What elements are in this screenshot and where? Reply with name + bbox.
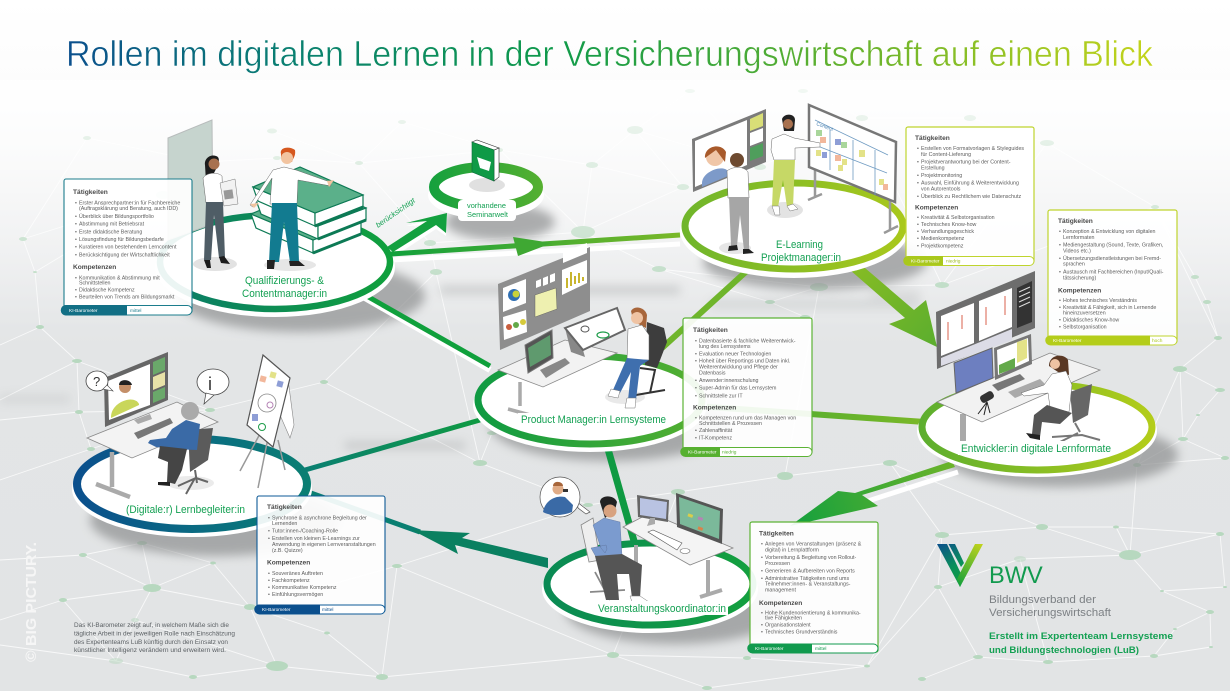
plate: vorhandene Seminarwelt: [428, 167, 544, 221]
list: Kompetenzen: Kommunikation & Abstimmung mit: [79, 275, 160, 281]
list: Kompetenzen: •: [695, 416, 697, 422]
list: Kompetenzen: Souveränes Auftreten: [272, 571, 323, 577]
illustration: developer desk with monitors: [936, 271, 1100, 446]
list: Tätigkeiten: management: [765, 588, 796, 594]
list: Tätigkeiten: von Autorentools: [921, 187, 961, 193]
icon: phone call bubble: [540, 477, 590, 517]
list: Kompetenzen: •: [75, 275, 77, 281]
BWV wordmark: BWV: [989, 563, 1043, 589]
list: Tätigkeiten: Überblick zu Rechtlichem wie Datenschutz: [921, 193, 1021, 200]
logo: BWV: [937, 544, 1173, 656]
plate: Qualifizierungs- und Contentmanager: [155, 215, 395, 317]
list: Tätigkeiten: Lösungsfindung für Bildungsbedarfe: [79, 237, 164, 243]
list: Kompetenzen: Kommunikative Kompetenz: [272, 585, 337, 591]
role label: E-Learning Projektmanager: E-Learning: [776, 239, 823, 251]
list: Kompetenzen: IT-Kompetenz: [699, 435, 732, 441]
list: Kompetenzen: Selbstorganisation: [1063, 324, 1107, 330]
list: Kompetenzen: •: [75, 295, 77, 301]
list: Tätigkeiten: •: [75, 229, 77, 235]
list: Tätigkeiten: •: [695, 338, 697, 344]
title: Rollen im digitalen Lernen in der Versicherungswirtschaft auf einen Blick: [66, 33, 1154, 74]
list: Tätigkeiten: Vorbereitung & Begleitung von Rollout-: [765, 555, 857, 561]
plate: Entwickler: [917, 384, 1157, 477]
KI-Barometer: hoch: KI-Barometer: [1053, 338, 1082, 344]
list: Tätigkeiten: Weiterentwicklung und Pflege der: [699, 365, 778, 371]
heading: Kompetenzen: Kompetenzen: [915, 204, 958, 211]
icon: info bubble: i: [208, 374, 212, 394]
KI-Barometer: hoch: hoch: [1152, 338, 1163, 344]
heading: Kompetenzen: Kompetenzen: [1058, 287, 1101, 294]
list: Tätigkeiten: •: [268, 528, 270, 534]
list: Tätigkeiten: Überblick über Bildungsportfolio: [79, 213, 154, 220]
role label: Veranstaltungskoordinator: Veranstaltungskoordinator:in: [598, 603, 726, 615]
role label: Entwickler: Entwickler:in digitale Lernformate: [961, 443, 1111, 455]
illustration: product manager statistics board: [498, 243, 590, 350]
list: Kompetenzen: •: [1059, 298, 1061, 304]
list: Tätigkeiten: •: [695, 393, 697, 399]
list: Tätigkeiten: •: [75, 214, 77, 220]
list: Tätigkeiten: •: [75, 200, 77, 206]
list: Tätigkeiten: •: [761, 576, 763, 582]
list: Kompetenzen: Schnittstellen: [79, 280, 111, 286]
panel: Veranstaltungskoordinator: [747, 522, 878, 653]
list: Kompetenzen: •: [1059, 317, 1061, 323]
list: Tätigkeiten: Mediengestaltung (Sound, Texte, Grafiken,: [1063, 242, 1163, 248]
list: Tätigkeiten: Erste didaktische Beratung: [79, 229, 142, 235]
note: KI-Barometer explanation: tägliche Arbeit in der jeweiligen Rolle nach Einschätzung: [74, 630, 235, 638]
heading: Tätigkeiten: Tätigkeiten: [693, 327, 728, 334]
list: Kompetenzen: Kreativität & Selbstorganisation: [921, 215, 995, 221]
list: Tätigkeiten: Abstimmung mit Betriebsrat: [79, 222, 145, 228]
illustration: project whiteboard: Content: [815, 121, 834, 133]
list: Tätigkeiten: Erstellen von Formatvorlagen & Styleguides: [921, 146, 1024, 152]
list: Tätigkeiten: Hoheit über Reportings und Daten inkl.: [699, 359, 790, 365]
plate: Product Manager: [473, 356, 707, 452]
line: Qualifizierung to Product Manager: [365, 298, 490, 370]
list: Tätigkeiten: sprachen: [1063, 262, 1085, 268]
list: Tätigkeiten: •: [75, 245, 77, 251]
list: Tätigkeiten: •: [268, 536, 270, 542]
list: Kompetenzen: Technisches Know-how: [921, 222, 977, 228]
KI-Barometer: niedrig: KI-Barometer: [911, 258, 940, 264]
list: Tätigkeiten: Kuratieren von bestehendem Lerncontent: [79, 245, 177, 251]
list: Tätigkeiten: •: [695, 351, 697, 357]
list: Tätigkeiten: Datenbasierte & fachliche Weiterentwick-: [699, 338, 796, 344]
list: Tätigkeiten: •: [761, 555, 763, 561]
list: Kompetenzen: •: [1059, 324, 1061, 330]
list: Kompetenzen: Didaktische Kompetenz: [79, 287, 135, 293]
list: Kompetenzen: •: [917, 222, 919, 228]
KI-Barometer: mittel: [254, 604, 385, 614]
list: Tätigkeiten: tätssicherung): [1063, 275, 1097, 281]
note: KI-Barometer explanation: künstlicher Intelligenz verändern und erweitern wird.: [74, 647, 226, 654]
KI-Barometer: mittel: KI-Barometer: [69, 308, 98, 314]
list: Tätigkeiten: •: [1059, 242, 1061, 248]
illustration: glass door: [168, 120, 213, 240]
role label: Qualifizierungs- und Contentmanager: Qualifizierungs- &: [245, 275, 325, 287]
KI-Barometer: niedrig: niedrig: [722, 450, 737, 456]
heading: Tätigkeiten: Tätigkeiten: [759, 531, 794, 538]
list: Tätigkeiten: •: [1059, 256, 1061, 262]
list: Tätigkeiten: •: [917, 173, 919, 179]
line: Lernbegleiter to Veranstaltung: [308, 492, 420, 532]
list: Tätigkeiten: •: [695, 378, 697, 384]
plate shadows: [0, 204, 1178, 644]
list: Kompetenzen: •: [917, 236, 919, 242]
KI-Barometer: niedrig: [680, 447, 812, 456]
list: Kompetenzen: •: [75, 287, 77, 293]
illustration: man with red hair: [250, 148, 334, 271]
list: Kompetenzen: Medienkompetenz: [921, 236, 965, 242]
label: vorhandene Seminarwelt: vorhandene: [467, 203, 506, 210]
arrow: Qualifizierung to E-Learning white edge: [391, 244, 680, 260]
illustration: project whiteboard: [808, 105, 898, 233]
list: Kompetenzen: •: [761, 630, 763, 636]
list: Tätigkeiten: Synchrone & asynchrone Begleitung der: [272, 515, 367, 521]
role label: Qualifizierungs- und Contentmanager: Contentmanager:in: [242, 288, 327, 300]
list: Tätigkeiten: •: [695, 359, 697, 365]
KI-Barometer: mittel: [61, 305, 192, 316]
heading: Kompetenzen: Kompetenzen: [267, 560, 310, 567]
panel: E-Learning Projektmanager: [903, 127, 1034, 266]
icon: info bubble: [197, 369, 229, 404]
illustration: stacked books: [251, 167, 366, 253]
illustration: woman with report: [193, 155, 238, 271]
list: Tätigkeiten: Anwendung in eigenen Lernveranstaltungen: [272, 542, 376, 548]
list: Tätigkeiten: (z.B. Quizze): [272, 548, 303, 554]
list: Tätigkeiten: Tutor:innen-/Coaching-Rolle: [272, 528, 338, 534]
list: Kompetenzen: Hohes technisches Verständnis: [1063, 298, 1137, 304]
list: Tätigkeiten: lung des Lernsystems: [699, 344, 751, 350]
icon: question bubble: [86, 371, 113, 391]
illustration: coordinator person on chair: [581, 496, 649, 602]
list: Kompetenzen: Technisches Grundverständnis: [765, 630, 838, 636]
heading: Kompetenzen: Kompetenzen: [693, 405, 736, 412]
list: Kompetenzen: Projektkompetenz: [921, 243, 964, 249]
list: Kompetenzen: Zahlenaffinität: [699, 428, 733, 434]
list: Kompetenzen: Einfühlungsvermögen: [272, 592, 323, 598]
list: Kompetenzen: Organisationstalent: [765, 623, 811, 629]
list: Kompetenzen: •: [695, 435, 697, 441]
panel: Lernbegleiter: [254, 496, 385, 614]
list: Kompetenzen: •: [917, 215, 919, 221]
KI-Barometer: mittel: mittel: [815, 646, 826, 652]
line: E-Learning to Product Manager: [662, 268, 750, 348]
line: Product Manager to Lernbegleiter: [305, 420, 480, 470]
heading: Tätigkeiten: Tätigkeiten: [915, 135, 950, 142]
note: KI-Barometer explanation: Das KI-Barometer zeigt auf, in welchem Maße sich die: [74, 622, 230, 629]
list: Tätigkeiten: Erster Ansprechpartner:in für Fachbereiche: [79, 200, 180, 206]
arrow: Qualifizierung to Seminarwelt green: [387, 213, 447, 252]
plate: Lernbegleiter: [72, 439, 312, 537]
list: Tätigkeiten: •: [761, 541, 763, 547]
illustration: developer person: [1021, 356, 1100, 442]
role label: E-Learning Projektmanager: Projektmanager:in: [761, 252, 841, 264]
list: Tätigkeiten: Super-Admin für das Lernsystem: [699, 386, 777, 392]
arrow: Qualifizierung to Seminarwelt: [390, 216, 447, 256]
arrowhead: Qualifizierung to E-Learning: [513, 237, 552, 256]
list: Kompetenzen: •: [695, 428, 697, 434]
list: Kompetenzen: •: [268, 578, 270, 584]
KI-Barometer: niedrig: KI-Barometer: [688, 450, 717, 456]
label: vorhandene Seminarwelt: Seminarwelt: [467, 212, 508, 219]
KI-Barometer: mittel: [747, 644, 878, 653]
vertical credit: BIG PICTURY: © BIG PICTURY.: [23, 542, 40, 662]
list: Tätigkeiten: •: [1059, 229, 1061, 235]
list: Kompetenzen: •: [268, 585, 270, 591]
illustration: trainer person: [148, 402, 214, 494]
role label: Product Manager: Product Manager:in Lernsysteme: [521, 414, 666, 426]
credit: Expertenteam: und Bildungstechnologien (LuB): [989, 645, 1139, 656]
arrow: E-Learning to Entwickler: [850, 262, 937, 347]
KI-Barometer: mittel: mittel: [130, 308, 141, 314]
illustration: woman from behind: [719, 153, 754, 254]
list: Tätigkeiten: Berücksichtigung der Wirtschaftlichkeit: [79, 252, 170, 258]
list: Tätigkeiten: •: [761, 568, 763, 574]
list: Tätigkeiten: Administrative Tätigkeiten rund ums: [765, 576, 849, 582]
list: Tätigkeiten: Konzeption & Entwicklung von digitalen: [1063, 229, 1156, 235]
list: Tätigkeiten: •: [917, 159, 919, 165]
list: Tätigkeiten: •: [75, 237, 77, 243]
list: Tätigkeiten: Schnittstelle zur IT: [699, 393, 743, 399]
list: Tätigkeiten: Erstellen von kleinen E-Learnings zur: [272, 536, 360, 542]
list: Tätigkeiten: Teilnehmer:innen- & Veranstaltungs-: [765, 582, 851, 588]
list: Kompetenzen: Hohe Kundenorientierung & kommunika-: [765, 610, 861, 616]
arrow: Qualifizierung to E-Learning: [391, 235, 680, 254]
plate: Veranstaltungskoordinator: [542, 543, 758, 633]
panel: Entwickler: [1045, 210, 1177, 345]
list: Tätigkeiten: Evaluation neuer Technologien: [699, 351, 771, 357]
list: Tätigkeiten: Anwender:innenschulung: [699, 378, 759, 384]
arrow: Entwickler to Veranstaltung: [790, 461, 955, 526]
list: Tätigkeiten: digital) in Lernplattform: [765, 547, 819, 553]
label backing strips: [518, 413, 1113, 615]
connection lines and arrows: [305, 213, 958, 568]
network top fade: [0, 80, 1230, 330]
list: Kompetenzen: Kompetenzen rund um das Managen von: [699, 416, 796, 422]
list: Kompetenzen: •: [917, 229, 919, 235]
note: KI-Barometer explanation: des Expertenteams LuB künftig durch den Einsatz von: [74, 639, 228, 646]
arrow: Veranstaltung to Lernbegleiter: [412, 530, 548, 568]
list: Kompetenzen: •: [917, 243, 919, 249]
list: Kompetenzen: •: [268, 592, 270, 598]
icon: BWV V mark: [937, 544, 983, 587]
KI-Barometer: mittel: KI-Barometer: [262, 607, 291, 613]
list: Tätigkeiten: Projektmonitoring: [921, 173, 962, 179]
label: berücksichtigt: berücksichtigt: [374, 195, 417, 230]
list: Kompetenzen: Beurteilen von Trends am Bildungsmarkt: [79, 295, 175, 301]
list: Tätigkeiten: Projektverantwortung bei der Content-: [921, 159, 1011, 165]
illustration: flipchart: [240, 355, 294, 488]
heading: Tätigkeiten: Tätigkeiten: [73, 189, 108, 196]
line: Product Manager to Entwickler: [695, 406, 925, 422]
list: Tätigkeiten: •: [75, 252, 77, 258]
illustration: product manager person: [605, 308, 667, 408]
list: Tätigkeiten: •: [695, 386, 697, 392]
KI-Barometer: niedrig: [903, 256, 1034, 266]
list: Kompetenzen: tive Fähigkeiten: [765, 616, 802, 622]
list: Tätigkeiten: •: [917, 146, 919, 152]
illustration: video wall: [692, 109, 766, 192]
list: Tätigkeiten: (Auftragsklärung und Beratung, auch IDD): [79, 206, 178, 212]
illustration: trainer desk with video screen: [87, 352, 218, 497]
heading: Kompetenzen: Kompetenzen: [73, 264, 116, 271]
list: Tätigkeiten: •: [1059, 269, 1061, 275]
list: Kompetenzen: •: [761, 610, 763, 616]
line: Qualifizierung to Product Manager green: [365, 295, 490, 366]
list: Kompetenzen: •: [268, 571, 270, 577]
list: Tätigkeiten: Auswahl, Einführung & Weiterentwicklung: [921, 181, 1019, 187]
list: Kompetenzen: Schnittstellen & Prozessen: [699, 421, 762, 427]
list: Tätigkeiten: Erstellung: [921, 165, 945, 171]
list: Kompetenzen: hineinzuversetzen: [1063, 310, 1106, 316]
list: Tätigkeiten: Austausch mit Fachbereichen (Input/Quali-: [1063, 269, 1164, 275]
illustration: product manager desk and devices: [498, 308, 625, 415]
list: Tätigkeiten: •: [268, 515, 270, 521]
heading: Tätigkeiten: Tätigkeiten: [1058, 218, 1093, 225]
list: Kompetenzen: Kreativität & Fähigkeit, sich in Lernende: [1063, 305, 1156, 311]
heading: Tätigkeiten: Tätigkeiten: [267, 504, 302, 511]
list: Tätigkeiten: Videos etc.): [1063, 248, 1091, 254]
arrow: Entwickler to Veranstaltung white edge: [865, 472, 958, 502]
panel: Qualifizierungs- und Contentmanager: [61, 179, 192, 316]
list: Tätigkeiten: Lernformaten: [1063, 235, 1095, 241]
role label: Lernbegleiter: (Digitale:r) Lernbegleiter:in: [126, 504, 245, 516]
list: Tätigkeiten: •: [917, 181, 919, 187]
line: Product Manager to Veranstaltung: [606, 442, 636, 548]
list: Tätigkeiten: •: [917, 194, 919, 200]
KI-Barometer: mittel: mittel: [322, 607, 333, 613]
credit: Expertenteam: Erstellt im Expertenteam Lernsysteme: [989, 631, 1173, 642]
panel: Product Manager: [680, 318, 812, 456]
list: Kompetenzen: •: [761, 623, 763, 629]
list: Tätigkeiten: für Content-Lieferung: [921, 152, 971, 158]
illustration: coordinator desk and monitors: [623, 493, 733, 597]
list: Tätigkeiten: •: [75, 222, 77, 228]
list: Kompetenzen: Didaktisches Know-how: [1063, 317, 1119, 323]
illustration: green book with basket: [469, 140, 505, 192]
list: Tätigkeiten: Datenbasis: [699, 371, 726, 377]
list: Kompetenzen: Verhandlungsgeschick: [921, 229, 974, 235]
plate: E-Learning Projektmanager: [680, 183, 908, 278]
organisation name: Versicherungswirtschaft: [989, 607, 1112, 619]
list: Tätigkeiten: Übersetzungsdienstleistungen bei Fremd-: [1063, 255, 1161, 262]
list: Tätigkeiten: Generieren & Aufbereiten von Reports: [765, 568, 855, 574]
list: Tätigkeiten: Lernenden: [272, 521, 297, 527]
illustration: man at whiteboard: [767, 115, 820, 218]
list: Kompetenzen: Fachkompetenz: [272, 578, 310, 584]
KI-Barometer: hoch: [1045, 336, 1177, 345]
KI-Barometer: niedrig: niedrig: [946, 258, 961, 264]
list: Tätigkeiten: Anlegen von Veranstaltungen (präsenz &: [765, 541, 862, 547]
heading: Kompetenzen: Kompetenzen: [759, 600, 802, 607]
icon: question bubble: ?: [93, 374, 100, 389]
list: Kompetenzen: •: [1059, 305, 1061, 311]
KI-Barometer: mittel: KI-Barometer: [755, 646, 784, 652]
list: Tätigkeiten: Prozessen: [765, 561, 790, 567]
organisation name: Bildungsverband der: [989, 594, 1096, 606]
